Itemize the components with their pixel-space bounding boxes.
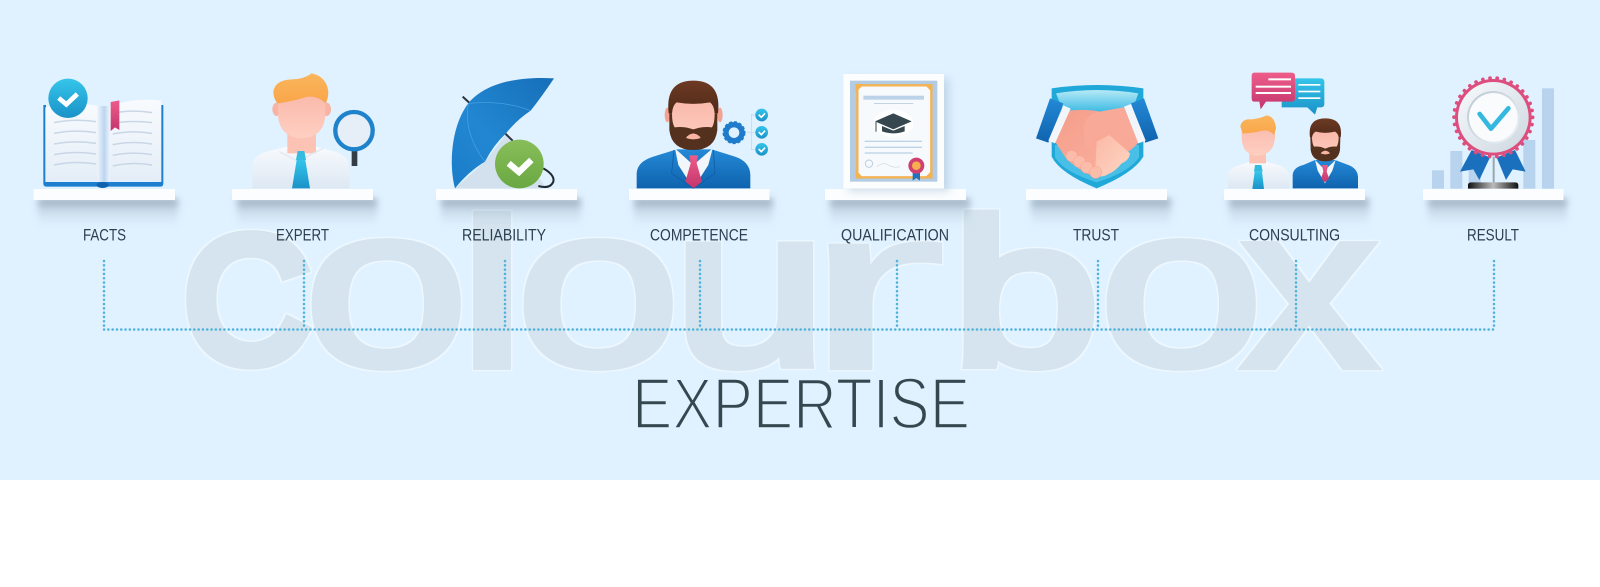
icon: handshake on shield bbox=[1036, 85, 1158, 188]
shelf shadows bbox=[38, 199, 1567, 228]
icon: framed qualification certificate bbox=[843, 74, 949, 192]
watermark: Colourbox: o bbox=[304, 158, 469, 414]
watermark: Colourbox: C bbox=[184, 202, 309, 399]
icon: open book with check badge bbox=[43, 79, 163, 188]
watermark: Colourbox: o bbox=[1099, 158, 1264, 414]
watermark: Colourbox bbox=[184, 157, 1374, 419]
watermark: Colourbox: o bbox=[516, 158, 681, 414]
icon: expert with magnifier bbox=[252, 73, 373, 188]
watermark: Colourbox: r bbox=[802, 157, 947, 419]
icon: result, rosette and bar chart bbox=[1432, 78, 1554, 189]
icon: competence, bearded man with gear and checks bbox=[637, 81, 768, 188]
watermark: Colourbox: u bbox=[673, 162, 827, 412]
label: RELIABILITY: RELIABILITY bbox=[462, 226, 546, 244]
watermark: Colourbox: l bbox=[460, 179, 524, 410]
dotted connector lines bbox=[104, 261, 1494, 330]
icon: umbrella with green check bbox=[452, 78, 554, 188]
watermark: Colourbox: b bbox=[952, 177, 1100, 409]
label: TRUST: TRUST bbox=[1073, 226, 1119, 244]
label: QUALIFICATION: QUALIFICATION bbox=[841, 226, 949, 244]
title: EXPERTISE: EXPERTISE bbox=[632, 364, 970, 444]
label: EXPERT: EXPERT bbox=[276, 226, 329, 244]
label: FACTS: FACTS bbox=[83, 226, 126, 244]
icon: consulting, two people with speech bubbles bbox=[1228, 73, 1358, 189]
label: RESULT: RESULT bbox=[1467, 226, 1519, 244]
shelves bbox=[34, 189, 1564, 200]
watermark: Colourbox: x bbox=[1245, 162, 1374, 413]
label: COMPETENCE: COMPETENCE bbox=[650, 226, 748, 244]
label: CONSULTING: CONSULTING bbox=[1249, 226, 1340, 244]
